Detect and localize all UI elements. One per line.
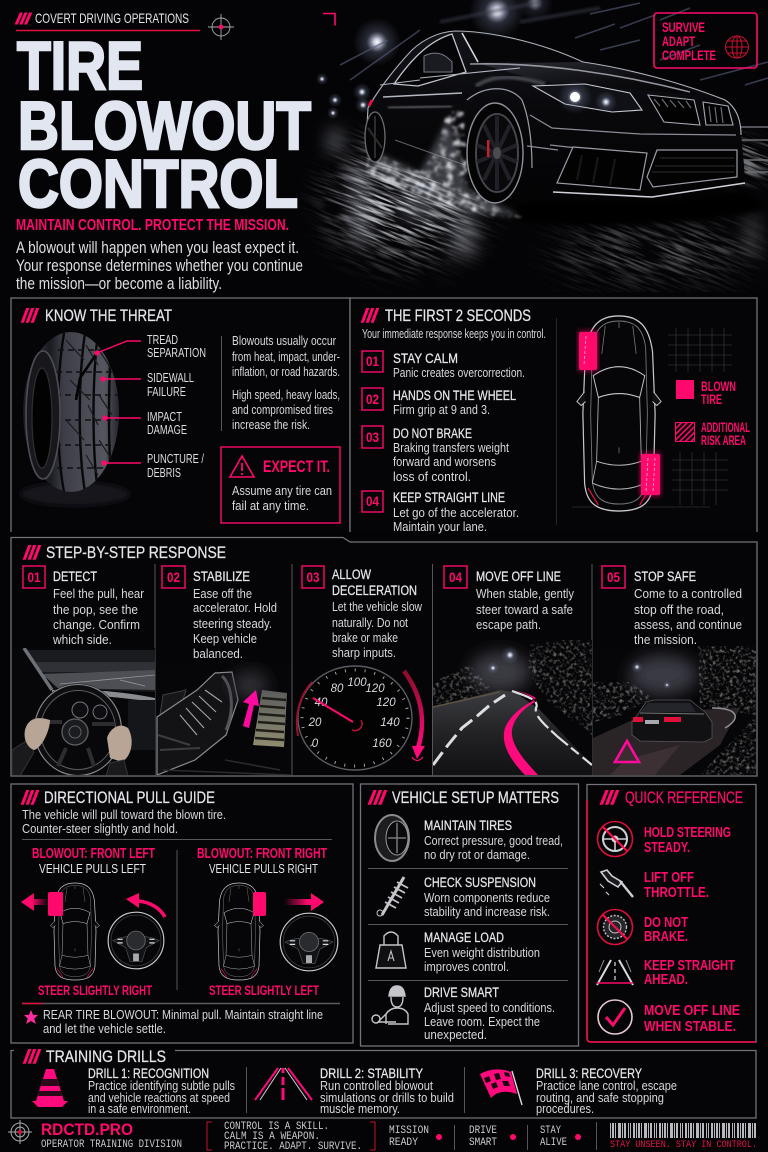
heading	[361, 306, 531, 326]
arrow: pull right	[284, 893, 324, 911]
step 04: move off line: MOVE OFF LINE	[476, 569, 561, 584]
step 02: stabilize: Ease off the	[193, 587, 252, 601]
icon: tire	[375, 815, 409, 861]
item: check suspension: stability and increase risk.	[424, 905, 550, 919]
icon: road	[597, 960, 633, 985]
legend: TIRE	[701, 392, 722, 407]
status: mission ready: MISSION	[389, 1125, 429, 1137]
step 03: forward and worsens	[393, 455, 496, 469]
status: drive smart: DRIVE	[469, 1125, 497, 1137]
diagram: car top view with blown tires	[556, 316, 732, 525]
column: front left blowout	[21, 846, 165, 998]
step 02: stabilize	[156, 566, 291, 775]
icon: crosshair	[208, 14, 234, 40]
panel: vehicle setup matters	[360, 784, 578, 1046]
step 01: detect: DETECT	[53, 569, 97, 584]
tire callouts: DAMAGE	[147, 422, 187, 437]
icon: driver	[372, 986, 408, 1024]
step 02: 02	[366, 392, 379, 407]
step 04: move off line: steer toward a safe	[476, 603, 573, 617]
column: front right blowout: BLOWOUT: FRONT RIGHT	[197, 846, 327, 862]
image: boot lifting off pedal	[156, 662, 291, 775]
item: manage load	[376, 930, 540, 974]
step 03: allow deceleration: 03	[306, 570, 320, 585]
item: do not brake: DO NOT	[644, 914, 688, 931]
callout: expect it: EXPECT IT.	[263, 458, 330, 476]
step 03: DO NOT BRAKE	[393, 426, 472, 441]
heading: ///	[600, 788, 619, 808]
subheading: Your immediate response keeps you in control.	[362, 327, 546, 341]
footer	[8, 1120, 757, 1152]
image: speedometer: 100	[347, 677, 367, 689]
heading	[600, 788, 743, 808]
step 03: allow deceleration: DECELERATION	[332, 583, 417, 598]
panel: the first 2 seconds	[350, 298, 757, 534]
icon: traffic cone	[32, 1069, 68, 1107]
header label: COVERT DRIVING OPERATIONS	[35, 10, 189, 26]
badge: survive adapt complete	[654, 13, 757, 68]
badge: survive adapt complete: SURVIVE	[662, 20, 705, 35]
tire callouts	[94, 332, 206, 480]
step 03: loss of control.	[393, 470, 471, 484]
item: maintain tires: MAINTAIN TIRES	[424, 818, 512, 833]
heading: TRAINING DRILLS	[46, 1048, 166, 1066]
item: manage load: Even weight distribution	[424, 946, 540, 960]
panel: directional pull guide	[11, 784, 353, 1043]
step 02	[362, 388, 516, 417]
item: lift off throttle: THROTTLE.	[644, 884, 709, 901]
drill 1: Practice identifying subtle pulls	[88, 1079, 235, 1093]
title	[17, 28, 311, 222]
step 03: allow deceleration	[297, 566, 425, 770]
badge: survive adapt complete: COMPLETE	[662, 48, 716, 63]
headlights	[533, 80, 642, 114]
rear tire note: REAR TIRE BLOWOUT: Minimal pull. Maintain straight line	[43, 1008, 323, 1022]
image: speedometer: 40	[315, 697, 328, 709]
tire callouts: PUNCTURE /	[147, 451, 204, 466]
threat text: from heat, impact, under-	[232, 350, 340, 364]
drill 2: muscle memory.	[320, 1102, 400, 1116]
intro: Counter-steer slightly and hold.	[22, 822, 178, 836]
barcode	[610, 1123, 757, 1138]
title: BLOWOUT	[18, 88, 311, 164]
item: check suspension	[377, 875, 550, 919]
legend: BLOWN	[701, 379, 736, 394]
step 05: stop safe	[593, 566, 756, 775]
heading: ///	[368, 788, 387, 808]
step 05: stop safe: the mission.	[634, 633, 697, 647]
drill 2: Run controlled blowout	[320, 1079, 433, 1093]
step 05: stop safe: STOP SAFE	[634, 569, 696, 584]
heading: ///	[21, 306, 39, 326]
grille and intakes	[557, 95, 737, 190]
motto: CONTROL IS A SKILL.	[224, 1121, 329, 1133]
drill 3	[480, 1066, 677, 1116]
brand: OPERATOR TRAINING DIVISION	[41, 1139, 182, 1151]
image: speedometer: 160	[372, 738, 392, 750]
item: lift off throttle	[600, 869, 709, 901]
step 01: detect: Feel the pull, hear	[53, 587, 144, 601]
column: front right blowout: STEER SLIGHTLY LEFT	[209, 983, 320, 998]
item: hold steering steady: HOLD STEERING	[644, 824, 731, 841]
item: lift off throttle: LIFT OFF	[644, 869, 694, 886]
heading	[23, 1047, 166, 1067]
slashes: ///	[15, 11, 32, 28]
status: stay alive: ALIVE	[540, 1137, 567, 1149]
step 03: allow deceleration: ALLOW	[332, 567, 371, 582]
intro text: A blowout will happen when you least expect it.	[16, 239, 299, 257]
item: keep straight ahead: KEEP STRAIGHT	[644, 957, 735, 974]
car body	[367, 31, 745, 205]
drill 3: DRILL 3: RECOVERY	[536, 1066, 642, 1081]
step 01: detect: 01	[28, 570, 41, 585]
status: mission ready	[389, 1125, 442, 1149]
callout: expect it: Assume any tire can	[232, 484, 332, 498]
drill 1: in a safe environment.	[88, 1102, 191, 1116]
heading	[368, 788, 559, 808]
item: drive smart: Leave room. Expect the	[424, 1015, 540, 1029]
image: speedometer	[297, 666, 425, 770]
heading	[21, 788, 215, 808]
item: keep straight ahead: AHEAD.	[644, 971, 688, 988]
tire callouts: FAILURE	[147, 384, 186, 399]
step 03: 03	[366, 430, 379, 445]
item: move off line	[598, 1000, 740, 1035]
status: mission ready: READY	[389, 1137, 418, 1149]
title: CONTROL	[18, 146, 298, 222]
step 05: stop safe: stop off the road,	[634, 603, 724, 617]
step 04: 04	[366, 494, 379, 509]
status: stay alive: STAY	[540, 1125, 561, 1137]
status: stay alive	[540, 1125, 581, 1149]
badge: survive adapt complete: ADAPT	[662, 34, 696, 49]
step 01	[362, 351, 525, 380]
item: do not brake: BRAKE.	[644, 928, 688, 945]
item: move off line: MOVE OFF LINE	[644, 1002, 740, 1019]
rear tire note: and let the vehicle settle.	[43, 1022, 166, 1036]
heading	[21, 306, 172, 326]
callout: expect it	[221, 447, 340, 523]
icon: weight	[376, 932, 406, 968]
front wheel	[467, 103, 523, 203]
step 03: Braking transfers weight	[393, 441, 509, 455]
step 02: HANDS ON THE WHEEL	[393, 388, 516, 403]
step 01: STAY CALM	[393, 351, 458, 366]
image: speedometer: 140	[380, 717, 400, 729]
step 01: detect	[12, 566, 155, 776]
column: front left blowout: STEER SLIGHTLY RIGHT	[38, 983, 153, 998]
step 01: detect: the pop, see the	[53, 603, 138, 617]
step 02: stabilize: steering steady.	[193, 617, 272, 631]
panel: know the threat	[11, 298, 350, 532]
step 04: move off line: escape path.	[476, 618, 541, 632]
heading: THE FIRST 2 SECONDS	[385, 307, 531, 325]
motto	[207, 1121, 375, 1152]
intro: The vehicle will pull toward the blown tire.	[22, 808, 226, 822]
heading: ///	[361, 306, 379, 326]
intro text	[16, 239, 303, 293]
step 01: Panic creates overcorrection.	[393, 366, 525, 380]
icon: suspension	[377, 877, 408, 916]
intro text: the mission—or become a liability.	[16, 275, 222, 293]
icon: globe	[726, 36, 748, 58]
step 04	[362, 490, 519, 534]
item: check suspension: CHECK SUSPENSION	[424, 875, 536, 890]
drill 1: DRILL 1: RECOGNITION	[88, 1066, 209, 1081]
water spray	[365, 110, 522, 220]
drill 3: procedures.	[536, 1102, 594, 1116]
item: maintain tires	[375, 815, 563, 862]
tire callouts: SIDEWALL	[147, 370, 194, 385]
drill 3: Practice lane control, escape	[536, 1079, 677, 1093]
steering wheel	[280, 913, 338, 971]
intro	[22, 808, 226, 836]
item: keep straight ahead	[597, 957, 735, 988]
heading: ///	[21, 788, 39, 808]
heading: VEHICLE SETUP MATTERS	[392, 789, 559, 807]
icon: brake disc prohibited	[598, 910, 632, 944]
step 02: stabilize: accelerator. Hold	[193, 601, 277, 615]
step 04: KEEP STRAIGHT LINE	[393, 490, 505, 505]
step 05: stop safe: 05	[607, 570, 620, 585]
step 04: move off line: When stable, gently	[476, 587, 575, 601]
icon: check mark	[598, 1000, 632, 1034]
image: car stopped off road with warning triangle	[593, 645, 756, 775]
callout: expect it: fail at any time.	[232, 499, 309, 513]
step 03: allow deceleration: sharp inputs.	[332, 646, 396, 660]
header rule	[16, 30, 200, 32]
threat text: and compromised tires	[232, 403, 333, 417]
step 01: 01	[366, 354, 379, 369]
item: check suspension: Worn components reduce	[424, 891, 550, 905]
tire image	[20, 332, 130, 506]
threat text: High speed, heavy loads,	[232, 388, 340, 402]
road reflections	[306, 122, 768, 292]
step 03: allow deceleration: brake or make	[332, 631, 398, 645]
image: speedometer: 80	[331, 683, 344, 695]
step 04: move off line	[433, 566, 592, 776]
title: TIRE	[17, 28, 143, 104]
step 05: stop safe: Come to a controlled	[634, 587, 742, 601]
header tag	[15, 10, 200, 30]
status: drive smart: SMART	[469, 1137, 497, 1149]
threat text: inflation, or road hazards.	[232, 365, 340, 379]
threat text	[232, 334, 340, 432]
step 02: stabilize: 02	[167, 570, 180, 585]
icon: throttle	[600, 870, 633, 897]
drill 1: and vehicle reactions at speed	[88, 1091, 230, 1105]
column: front right blowout	[197, 846, 338, 998]
street lamps and rain	[316, 0, 768, 119]
item: do not brake	[598, 910, 688, 945]
icon: warning triangle	[230, 456, 254, 477]
item: drive smart: Adjust speed to conditions.	[424, 1001, 555, 1015]
step 03: allow deceleration: naturally. Do not	[332, 616, 408, 630]
legend	[676, 379, 750, 448]
item: maintain tires: Correct pressure, good tread,	[424, 834, 563, 848]
image: speedometer: 0	[312, 738, 319, 750]
step 04: move off line: 04	[449, 570, 462, 585]
icon: crosshair	[8, 1120, 32, 1144]
step 03	[362, 426, 509, 484]
threat text: increase the risk.	[232, 418, 310, 432]
panel: step-by-step response	[11, 538, 757, 776]
rear tire note	[24, 1008, 323, 1036]
heading	[23, 543, 226, 563]
tire callouts: TREAD	[147, 332, 178, 347]
item: maintain tires: no dry rot or damage.	[424, 848, 530, 862]
step 02: Firm grip at 9 and 3.	[393, 403, 490, 417]
item: move off line: WHEN STABLE.	[644, 1018, 736, 1035]
threat text: Blowouts usually occur	[232, 334, 336, 348]
rear wheel	[365, 112, 385, 162]
heading: KNOW THE THREAT	[45, 307, 172, 325]
tire callouts: SEPARATION	[147, 345, 206, 360]
icon: steering wheel prohibited	[598, 822, 632, 856]
heading: DIRECTIONAL PULL GUIDE	[44, 789, 215, 807]
item: hold steering steady: STEADY.	[644, 839, 690, 856]
corner bracket	[323, 14, 335, 26]
intro text: Your response determines whether you continue	[16, 257, 303, 275]
step 01: detect: change. Confirm	[53, 618, 140, 632]
step 03: allow deceleration: Let the vehicle slow	[332, 600, 423, 614]
tagline: MAINTAIN CONTROL. PROTECT THE MISSION.	[16, 217, 289, 234]
image: speedometer: 120	[365, 683, 385, 695]
drill 2	[255, 1066, 454, 1116]
icon: road	[255, 1068, 312, 1100]
drill 3: routing, and safe stopping	[536, 1091, 664, 1105]
steering wheel with turn arrow	[108, 893, 165, 969]
step 01: detect: which side.	[52, 633, 112, 647]
item: drive smart	[372, 985, 555, 1042]
heading: ///	[23, 1047, 41, 1067]
column: front left blowout: VEHICLE PULLS LEFT	[39, 861, 146, 876]
brand	[41, 1120, 182, 1151]
step 04: Let go of the accelerator.	[393, 506, 519, 520]
item: drive smart: unexpected.	[424, 1028, 487, 1042]
tire callouts: IMPACT	[147, 409, 182, 424]
step 02: stabilize: Keep vehicle	[193, 632, 257, 646]
panel: training drills	[11, 1047, 756, 1118]
item: drive smart: DRIVE SMART	[424, 985, 499, 1000]
heading: STEP-BY-STEP RESPONSE	[46, 544, 226, 562]
hero image: black car on wet road	[306, 0, 768, 292]
image: speedometer: 20	[308, 717, 322, 729]
icon: checkered flag	[480, 1069, 522, 1105]
drill 1	[32, 1066, 235, 1116]
status: drive smart	[469, 1125, 516, 1149]
arrow: pull left	[21, 893, 48, 911]
step 02: stabilize: balanced.	[193, 647, 243, 661]
drill 2: simulations or drills to build	[320, 1091, 454, 1105]
tire callouts: DEBRIS	[147, 465, 181, 480]
column: front right blowout: VEHICLE PULLS RIGHT	[209, 861, 318, 876]
image: speedometer: 120	[376, 697, 396, 709]
item: manage load: improves control.	[424, 960, 509, 974]
drill 2: DRILL 2: STABILITY	[320, 1066, 423, 1081]
image: night road with escape path	[433, 640, 592, 776]
column: front left blowout: BLOWOUT: FRONT LEFT	[32, 846, 155, 862]
motto: CALM IS A WEAPON.	[224, 1131, 320, 1143]
image: driver's hands on the wheel	[12, 648, 155, 776]
step 04: Maintain your lane.	[393, 520, 487, 534]
panel: quick reference	[587, 784, 756, 1042]
step 02: stabilize: STABILIZE	[193, 569, 250, 584]
item: hold steering steady	[598, 822, 731, 856]
step 05: stop safe: assess, and continue	[634, 618, 742, 632]
brand: RDCTD.PRO	[41, 1120, 133, 1139]
item: manage load: MANAGE LOAD	[424, 930, 504, 945]
heading: ///	[23, 543, 41, 563]
